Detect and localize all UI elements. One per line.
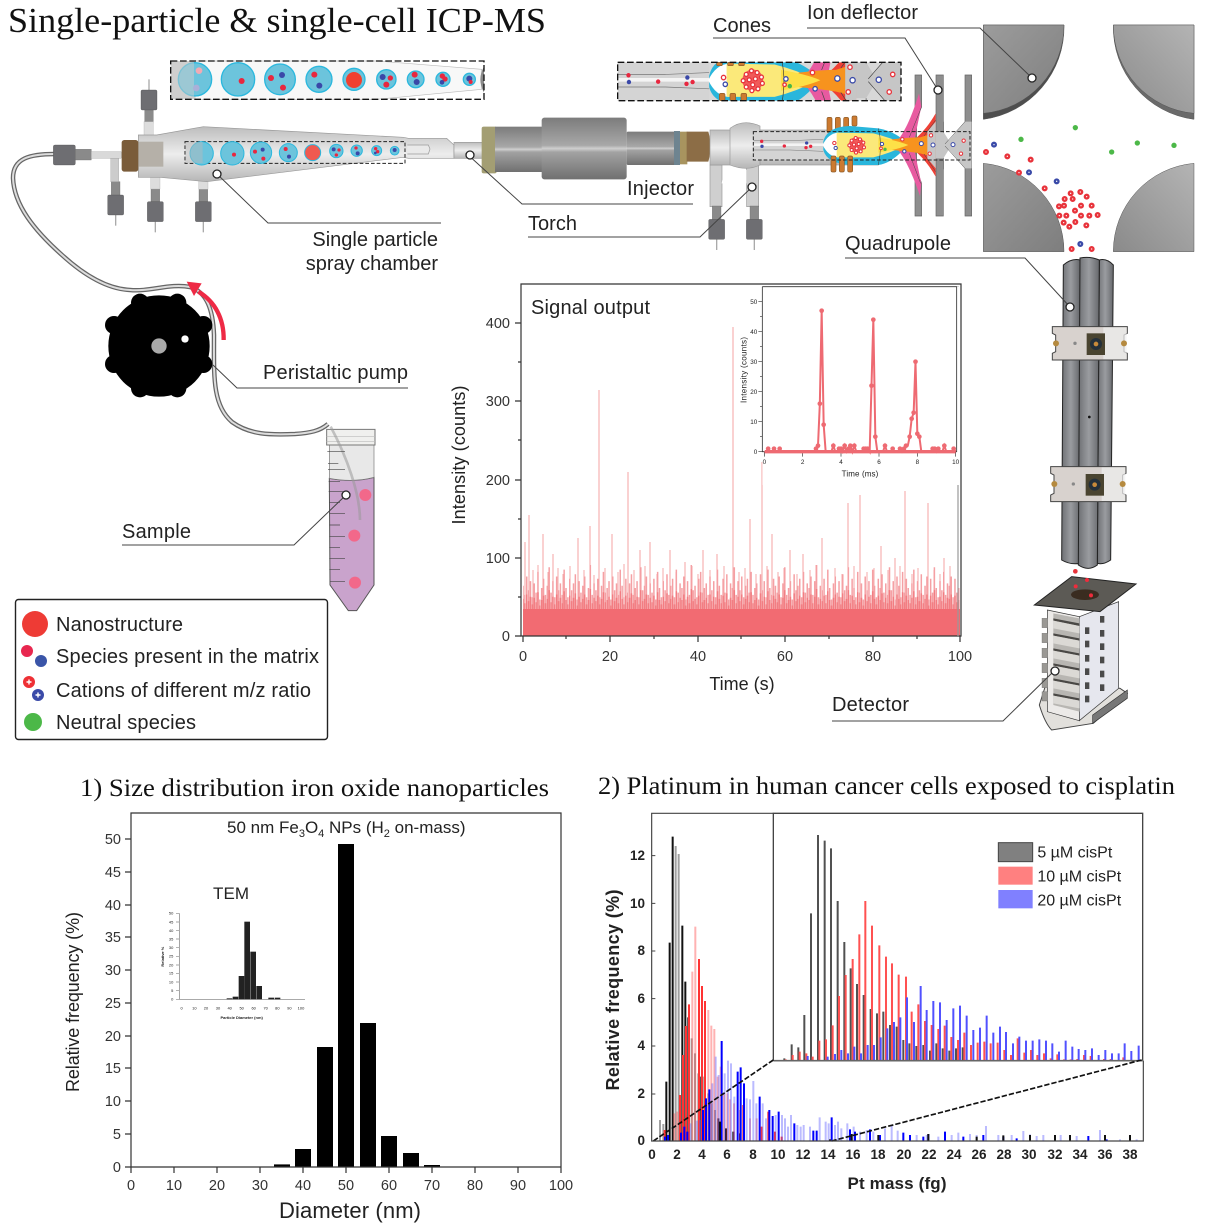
TEM inset histogram: 50 [239, 1005, 245, 1010]
detector [1034, 569, 1136, 730]
chart title: 2 [384, 828, 390, 840]
bars [274, 844, 440, 1167]
signal inset chart: 50 [750, 299, 758, 306]
label: torch: Torch [528, 213, 577, 235]
outer frame [652, 813, 1143, 1141]
platinum x axis numbers: 20 [896, 1147, 912, 1162]
TEM inset histogram: 20 [204, 1005, 209, 1010]
platinum x axis numbers: 16 [845, 1147, 861, 1162]
platinum x axis numbers: 26 [971, 1147, 987, 1162]
TEM inset histogram: 10 [169, 979, 174, 984]
swatch legend: 20 µM cisPt [1037, 892, 1122, 909]
droplet zoom panel [171, 61, 484, 99]
signal axis numbers: 80 [865, 649, 881, 665]
platinum y axis numbers: 10 [630, 896, 645, 911]
platinum x axis numbers: 2 [673, 1147, 681, 1162]
signal inset chart: 40 [750, 329, 758, 336]
torch glass [710, 123, 878, 168]
platinum x axis numbers: 28 [996, 1147, 1012, 1162]
upper clamp [1052, 327, 1127, 360]
signal axis numbers: 40 [690, 649, 706, 665]
platinum y axis numbers: 6 [637, 991, 645, 1006]
signal x axis title: Time (s) [709, 674, 775, 694]
label: cones: Cones [713, 15, 771, 37]
TEM inset histogram: 50 [169, 911, 174, 916]
platinum x axis numbers: 8 [749, 1147, 757, 1162]
dashed zoom region in chamber [185, 142, 405, 163]
TEM label: TEM [213, 884, 249, 903]
quadrupole rods and detector [1034, 257, 1136, 730]
TEM inset histogram: 15 [169, 971, 174, 976]
TEM inset histogram: 0 [171, 997, 174, 1002]
y axis numbers: 10 [105, 1094, 121, 1110]
signal axis numbers: 0 [502, 629, 510, 645]
signal output chart [449, 284, 972, 694]
magnified inset [773, 813, 1143, 1061]
label: quadrupole: Quadrupole [845, 233, 951, 255]
platinum y axis numbers [630, 848, 645, 1148]
TEM inset histogram: Relative % [160, 946, 165, 967]
TEM inset histogram [160, 911, 305, 1020]
y axis numbers [105, 832, 121, 1176]
signal inset chart: 4 [839, 459, 843, 466]
title: Single-particle & single-cell ICP-MS [8, 1, 546, 40]
x axis numbers: 60 [381, 1178, 397, 1194]
signal axis numbers: 100 [486, 551, 510, 567]
signal inset chart [739, 287, 960, 485]
signal axis numbers: 60 [777, 649, 793, 665]
signal inset chart: 2 [801, 459, 805, 466]
x axis numbers: 80 [467, 1178, 483, 1194]
signal heading: Signal output [531, 297, 650, 319]
x axis numbers: 10 [166, 1178, 182, 1194]
signal inset chart: 6 [877, 459, 881, 466]
platinum y axis numbers: 12 [630, 848, 645, 863]
platinum y axis numbers: 0 [637, 1133, 645, 1148]
axes [125, 813, 561, 1173]
flow direction arrow [187, 282, 224, 340]
platinum x axis numbers: 24 [946, 1147, 962, 1162]
platinum x axis numbers: 36 [1097, 1147, 1113, 1162]
TEM inset histogram: 20 [169, 962, 174, 967]
x axis numbers: 50 [338, 1178, 354, 1194]
ICP torch and interface [482, 11, 972, 250]
signal inset chart: 20 [750, 389, 758, 396]
x axis numbers: 0 [127, 1178, 135, 1194]
x axis numbers: 30 [252, 1178, 268, 1194]
TEM inset histogram: 30 [169, 945, 174, 950]
label: ion deflector: Ion deflector [807, 2, 918, 24]
y axis numbers: 0 [113, 1160, 121, 1176]
TEM inset histogram: 25 [169, 954, 174, 959]
platinum y axis numbers: 8 [637, 943, 645, 958]
pump rotor [105, 294, 212, 397]
legend [16, 600, 328, 740]
quadrupole rods [1062, 257, 1113, 568]
injector cylinder [482, 118, 710, 179]
y axis numbers: 20 [105, 1029, 121, 1045]
platinum x axis numbers: 34 [1072, 1147, 1088, 1162]
chart title: 4 [318, 828, 324, 840]
TEM inset histogram: 90 [287, 1005, 292, 1010]
torch connectors [709, 165, 762, 250]
y axis numbers: 45 [105, 865, 121, 881]
y axis numbers: 25 [105, 996, 121, 1012]
ions in quadrupole [984, 125, 1177, 251]
TEM inset histogram: Particle Diameter (nm) [221, 1015, 263, 1020]
x axis numbers: 90 [510, 1178, 526, 1194]
signal axis numbers: 300 [486, 394, 510, 410]
platinum y axis numbers: 4 [637, 1038, 645, 1053]
signal inset chart: 10 [952, 459, 960, 466]
chart title: NPs (H [324, 818, 384, 837]
platinum x axis numbers: 12 [795, 1147, 811, 1162]
signal axis numbers: 100 [948, 649, 972, 665]
main histogram bars [660, 837, 1137, 1141]
heading: size distribution: 1) Size distribution iron oxide nanoparticles [80, 775, 549, 802]
chart title: O [305, 818, 318, 837]
TEM inset histogram: 0 [181, 1005, 184, 1010]
chart title: on-mass) [390, 818, 466, 837]
x axis numbers: 20 [209, 1178, 225, 1194]
TEM inset histogram: 70 [263, 1005, 269, 1010]
leader lines and marker dots [122, 28, 1074, 721]
y axis numbers: 50 [105, 832, 121, 848]
x axis title: Diameter (nm) [279, 1198, 421, 1223]
signal axis numbers [486, 316, 972, 665]
TEM inset histogram: 45 [169, 919, 174, 924]
legend: species in matrix: Species present in the matrix [56, 646, 319, 668]
signal axis numbers: 400 [486, 316, 510, 332]
label: single particle spray chamber: Single particle [312, 229, 438, 251]
quadrupole poles [983, 25, 1194, 252]
legend: nanostructure [22, 611, 183, 637]
TEM inset histogram: 40 [169, 928, 174, 933]
zoom guide lines [653, 1060, 1142, 1141]
signal inset chart: 30 [750, 359, 758, 366]
label: sample: Sample [122, 521, 191, 543]
chart title: 50 nm Fe [227, 818, 299, 837]
dashed zoom region in torch [753, 132, 970, 160]
legend: cations: Cations of different m/z ratio [56, 680, 311, 702]
signal inset chart: 0 [754, 449, 758, 456]
platinum x axis numbers: 0 [648, 1147, 656, 1162]
platinum x axis numbers: 18 [870, 1147, 886, 1162]
swatch legend: 5 µM cisPt [1037, 845, 1113, 862]
plasma and ion beam [753, 93, 972, 196]
glass chamber body [138, 127, 454, 182]
y axis numbers: 35 [105, 930, 121, 946]
spray chamber assembly [53, 61, 484, 232]
platinum mass distribution chart [603, 813, 1143, 1193]
y axis numbers: 30 [105, 963, 121, 979]
plasma zoom panel [617, 62, 902, 102]
y axis title: Relative frequency (%) [63, 912, 83, 1092]
platinum x axis numbers: 32 [1047, 1147, 1063, 1162]
connectors on the spray chamber [53, 79, 211, 232]
label: single particle spray chamber: spray chamber [306, 253, 438, 275]
signal trace [523, 327, 960, 636]
platinum x axis numbers: 38 [1122, 1147, 1138, 1162]
x axis numbers: 70 [424, 1178, 440, 1194]
y axis numbers: 15 [105, 1061, 121, 1077]
platinum x axis numbers: 22 [921, 1147, 937, 1162]
label: detector: Detector [832, 694, 909, 716]
platinum x axis numbers: 10 [770, 1147, 786, 1162]
signal y axis title: Intensity (counts) [449, 386, 469, 524]
swatch legend [998, 843, 1122, 909]
TEM inset histogram: 80 [275, 1005, 280, 1010]
TEM inset histogram: 40 [227, 1005, 233, 1010]
x axis numbers [127, 1178, 573, 1194]
x axis numbers: 100 [549, 1178, 573, 1194]
platinum x axis numbers: 14 [820, 1147, 836, 1162]
lower clamp [1051, 467, 1126, 502]
platinum x axis numbers: 4 [698, 1147, 706, 1162]
load coil back turns [827, 116, 857, 133]
signal axis numbers: 0 [519, 649, 527, 665]
heading: platinum in cells: 2) Platinum in human cancer cells exposed to cisplatin [598, 773, 1176, 800]
platinum x axis numbers: 30 [1021, 1147, 1037, 1162]
legend: neutral species: Neutral species [56, 712, 196, 734]
TEM inset histogram: 100 [298, 1005, 305, 1010]
TEM inset histogram: 60 [251, 1005, 257, 1010]
TEM inset histogram: 10 [192, 1005, 197, 1010]
signal inset chart: 8 [916, 459, 920, 466]
peristaltic pump [105, 282, 224, 397]
x axis numbers: 40 [295, 1178, 311, 1194]
signal inset chart: 0 [763, 459, 767, 466]
signal inset chart: Intensity (counts) [739, 337, 748, 403]
label: peristaltic pump: Peristaltic pump [263, 362, 408, 384]
TEM inset histogram: 30 [216, 1005, 221, 1010]
platinum x axis numbers [648, 1147, 1138, 1162]
size distribution chart [63, 813, 573, 1223]
droplets in chamber [185, 142, 399, 165]
y axis numbers: 40 [105, 898, 121, 914]
y axis numbers: 5 [113, 1127, 121, 1143]
swatch legend: 10 µM cisPt [1037, 868, 1122, 885]
signal inset chart: Time (ms) [842, 470, 879, 479]
sample tubing [13, 154, 328, 434]
label: injector: Injector [627, 178, 694, 200]
signal axis numbers: 200 [486, 473, 510, 489]
platinum y axis title: Relative frequency (%) [603, 890, 623, 1090]
platinum x axis title: Pt mass (fg) [848, 1174, 946, 1193]
cone plates [915, 75, 972, 216]
TEM inset histogram: 35 [169, 936, 174, 941]
platinum y axis numbers: 2 [637, 1086, 645, 1101]
sample tube [327, 427, 375, 611]
platinum x axis numbers: 6 [723, 1147, 731, 1162]
TEM inset histogram: 5 [171, 988, 174, 993]
chart title: 3 [299, 828, 305, 840]
signal axis numbers: 20 [602, 649, 618, 665]
signal axes [515, 284, 961, 642]
legend: nanostructure: Nanostructure [56, 614, 183, 636]
signal inset chart: 10 [750, 419, 758, 426]
quadrupole top view with ions [983, 25, 1194, 252]
load coil front turns [831, 156, 853, 172]
